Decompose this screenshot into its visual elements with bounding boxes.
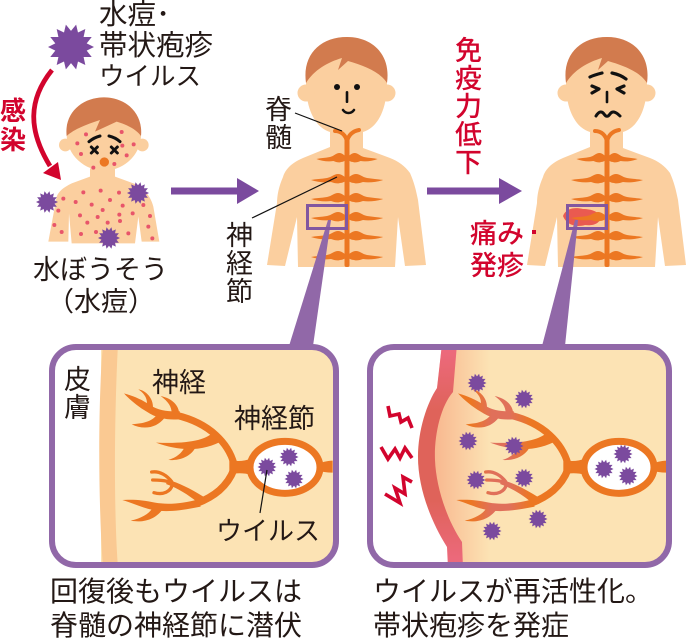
figure: healthy man with spinal cord xyxy=(267,37,426,267)
label: weakened immunity: 疫 xyxy=(455,64,482,94)
label: virus: ウイルス xyxy=(216,516,320,546)
label: skin: 膚 xyxy=(64,393,91,423)
callout pointer: left zoom xyxy=(289,206,346,346)
panel: reactivated virus xyxy=(367,344,669,568)
label: pain and rash: 発疹 xyxy=(470,251,524,281)
heading: virus name: ウイルス xyxy=(99,63,201,91)
label: spinal cord: 脊 xyxy=(265,95,292,125)
viruses in ganglion xyxy=(258,448,304,488)
label: chickenpox: （水痘） xyxy=(47,287,155,317)
label: skin: 皮 xyxy=(64,365,91,395)
label: weakened immunity: 下 xyxy=(455,148,482,178)
label: spinal cord: 髄 xyxy=(265,123,292,153)
label: spinal cord xyxy=(265,95,342,153)
panel: latent virus in ganglion xyxy=(52,344,336,568)
heading: virus name xyxy=(99,0,213,91)
arrow: to latent stage xyxy=(171,178,259,204)
caption: after recovery: 回復後もウイルスは xyxy=(50,576,302,607)
label: virus xyxy=(216,470,320,546)
label: pain and rash xyxy=(470,219,536,281)
label: ganglion: 節 xyxy=(226,277,253,307)
label: pain and rash: 痛み xyxy=(470,219,524,249)
caption: after recovery xyxy=(50,576,302,640)
icon: large virus xyxy=(48,25,94,69)
nerve and ganglion xyxy=(122,389,333,521)
label: skin xyxy=(64,365,91,423)
label: infection xyxy=(0,96,26,155)
arrow: to reactivation xyxy=(427,178,522,204)
label: nerve: 神経 xyxy=(152,368,206,398)
heading: virus name: 帯状疱疹 xyxy=(99,30,213,62)
callout pointer: right zoom xyxy=(542,206,606,346)
label: weakened immunity xyxy=(455,36,482,178)
figure: child with chickenpox xyxy=(36,97,159,249)
label: ganglion: 神経節 xyxy=(234,404,315,434)
nerve and ganglion xyxy=(456,389,667,521)
viruses xyxy=(458,374,638,540)
figure: man with shingles xyxy=(527,37,686,267)
label: infection: 染 xyxy=(0,125,26,155)
label: chickenpox xyxy=(33,255,168,317)
icon: pain zigzags xyxy=(381,406,412,503)
label: chickenpox: 水ぼうそう xyxy=(33,255,168,285)
label: ganglion: 経 xyxy=(226,249,253,279)
caption: reactivation xyxy=(373,576,653,640)
label: weakened immunity: 力 xyxy=(455,92,482,122)
label: weakened immunity: 免 xyxy=(455,36,482,66)
caption: reactivation: ウイルスが再活性化。 xyxy=(373,576,653,607)
label: infection: 感 xyxy=(0,96,26,126)
label: weakened immunity: 低 xyxy=(455,120,482,150)
label: ganglion: 神 xyxy=(226,221,253,251)
arrow: infection xyxy=(34,70,61,180)
label: ganglion xyxy=(226,177,337,307)
